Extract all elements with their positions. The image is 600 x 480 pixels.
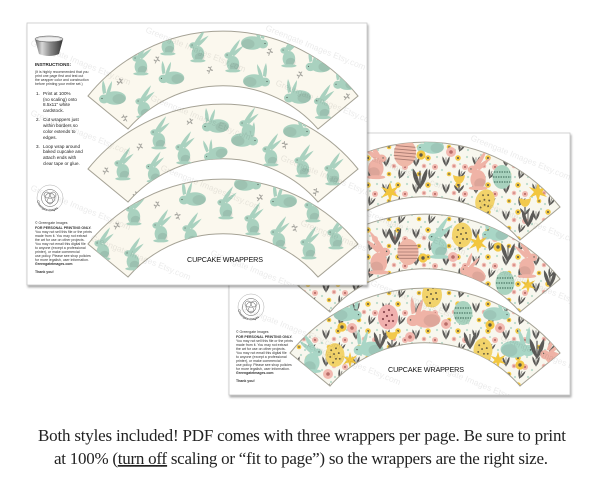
- text block: step 2: edges.: [43, 135, 57, 140]
- wrapper: bunny middle: [88, 104, 358, 202]
- text block: step 1: [36, 91, 77, 113]
- text block: step 3: 3.: [36, 144, 40, 149]
- text block: recommendation: before printing your entire set.): [35, 82, 83, 86]
- panel: bunny wrappers sheet: [26, 22, 370, 289]
- text block: usage notice (bunny sheet): You may not sell this file or the prints: [35, 230, 92, 234]
- watermarks: bunny sheet: Greengate Images Etsy.com: [29, 183, 132, 232]
- wrapper: floral top: [367, 142, 561, 241]
- text block: step 3: attach ends with: [43, 155, 77, 160]
- text block: step 3: Loop wrap around: [43, 144, 80, 149]
- text block: usage notice (bunny sheet): to anyone (except a professional: [35, 246, 86, 250]
- text block: usage notice (floral sheet): © Greengate Images: [236, 330, 269, 334]
- text block: usage notice (floral sheet): printer), or make commercial: [236, 359, 281, 363]
- watermarks: bunny sheet: Greengate Images Etsy.com: [29, 38, 132, 87]
- wrapper: bunny top: [88, 22, 358, 129]
- watermarks: floral sheet: Greengate Images Etsy.com: [499, 333, 600, 382]
- text block: step 3: clear tape or glue.: [43, 161, 80, 166]
- watermarks: bunny sheet: Greengate Images Etsy.com: [89, 233, 192, 282]
- text block: step 1: 8.5x11" white: [43, 102, 71, 107]
- heading: cupcake wrappers (floral): CUPCAKE WRAPPERS: [388, 365, 464, 374]
- watermarks: floral sheet: Greengate Images Etsy.com: [234, 233, 337, 282]
- watermarks: bunny sheet: Greengate Images Etsy.com: [159, 163, 262, 212]
- caption: at 100% (turn off scaling or “fit to page”) so the wrappers are the right size.: [54, 449, 548, 468]
- sheet background: [27, 23, 367, 285]
- text block: step 2: [36, 117, 79, 140]
- text block: step 2: 2.: [36, 117, 40, 122]
- sheet background: [229, 133, 570, 395]
- icon: logo (bunny sheet): Greengate Images: [37, 200, 58, 212]
- text block: usage notice (floral sheet): [236, 330, 293, 383]
- watermarks: bunny sheet: Greengate Images Etsy.com: [299, 218, 402, 267]
- watermarks: floral sheet: Greengate Images Etsy.com: [469, 133, 572, 182]
- wrapper: bunny bottom: [88, 166, 358, 277]
- watermarks: floral sheet: Greengate Images Etsy.com: [239, 158, 342, 207]
- text block: usage notice (floral sheet): FOR PERSONAL PRINTING ONLY.: [236, 335, 292, 339]
- text block: step 2: within borders so: [43, 123, 78, 128]
- watermarks: bunny sheet: Greengate Images Etsy.com: [279, 153, 382, 202]
- text block: usage notice (floral sheet): You may not sell this file or the prints: [236, 339, 293, 343]
- text block: usage notice (floral sheet): GreengateImages.com: [236, 371, 274, 375]
- watermarks: floral sheet: Greengate Images Etsy.com: [489, 263, 592, 312]
- watermarks: floral sheet: Greengate Images Etsy.com: [299, 338, 402, 387]
- text block: usage notice (floral sheet): the art for use on other projects.: [236, 347, 286, 351]
- watermarks: bunny sheet: Greengate Images Etsy.com: [144, 25, 247, 74]
- text block: usage notice (bunny sheet): You may not email this digital file: [35, 242, 86, 246]
- watermarks: floral sheet: Greengate Images Etsy.com: [424, 358, 527, 407]
- heading: instructions: INSTRUCTIONS:: [35, 62, 71, 67]
- text block: usage notice (floral sheet): Thank you!: [236, 379, 255, 383]
- text block: step 1: 1.: [36, 91, 40, 96]
- text block: step 1: cardstock.: [43, 108, 64, 113]
- text block: usage notice (floral sheet): made from it. You may not extract: [236, 343, 288, 347]
- watermarks: bunny sheet: Greengate Images Etsy.com: [149, 93, 252, 142]
- watermarks: floral sheet: Greengate Images Etsy.com: [369, 278, 472, 327]
- icon: cupcake liner: [35, 36, 63, 56]
- icon: logo (floral sheet): Greengate Images: [238, 310, 259, 320]
- panel: floral wrappers sheet: [228, 132, 573, 399]
- wrapper: floral middle: [290, 214, 560, 312]
- watermarks: floral sheet: Greengate Images Etsy.com: [364, 208, 467, 257]
- text block: usage notice (bunny sheet): [35, 221, 92, 274]
- text block: step 1: (no scaling) onto: [43, 97, 77, 102]
- text block: usage notice (floral sheet): for more legalish, user information.: [236, 367, 290, 371]
- text block: step 1: Print at 100%: [43, 91, 71, 96]
- text block: usage notice (bunny sheet): © Greengate Images: [35, 221, 68, 225]
- text block: usage notice (bunny sheet): printer), or make commercial: [35, 250, 80, 254]
- text block: usage notice (bunny sheet): use policy. Please see shop policies: [35, 254, 91, 258]
- text block: usage notice (floral sheet): to anyone (except a professional: [236, 355, 287, 359]
- caption: [38, 426, 566, 468]
- watermarks: floral sheet: Greengate Images Etsy.com: [344, 143, 447, 192]
- wrapper: floral bottom: [290, 282, 574, 386]
- icon: logo (bunny sheet): [36, 184, 64, 212]
- text block: usage notice (bunny sheet): the art for use on other projects.: [35, 238, 85, 242]
- heading: cupcake wrappers (bunny): CUPCAKE WRAPPERS: [187, 255, 263, 264]
- icon: logo (floral sheet): [238, 294, 264, 320]
- text block: usage notice (floral sheet): use policy. Please see shop policies: [236, 363, 292, 367]
- text block: step 2: Cut wrappers just: [43, 117, 79, 122]
- watermarks: bunny sheet: Greengate Images Etsy.com: [264, 23, 367, 72]
- text block: usage notice (bunny sheet): FOR PERSONAL PRINTING ONLY.: [35, 226, 91, 230]
- watermarks: bunny sheet: Greengate Images Etsy.com: [29, 108, 132, 157]
- text block: usage notice (bunny sheet): for more legalish, user information.: [35, 258, 89, 262]
- watermarks: bunny sheet: Greengate Images Etsy.com: [209, 248, 312, 297]
- watermarks: bunny sheet: Greengate Images Etsy.com: [274, 78, 377, 127]
- watermarks: floral sheet: [241, 136, 570, 395]
- watermarks: bunny sheet: [31, 26, 367, 285]
- text block: usage notice (bunny sheet): Thank you!: [35, 270, 54, 274]
- text block: step 2: color extends to: [43, 129, 76, 134]
- watermarks: floral sheet: Greengate Images Etsy.com: [479, 198, 582, 247]
- text block: recommendation: [35, 70, 89, 86]
- text block: step 3: [36, 144, 83, 166]
- watermarks: floral sheet: Greengate Images Etsy.com: [239, 303, 342, 352]
- text block: usage notice (floral sheet): You may not email this digital file: [236, 351, 287, 355]
- text block: usage notice (bunny sheet): made from it. You may not extract: [35, 234, 87, 238]
- text block: recommendation: the wrapper color and construction: [35, 78, 89, 82]
- text block: recommendation: print one page first and test out: [35, 74, 83, 78]
- text block: usage notice (bunny sheet): GreengateImages.com: [35, 262, 73, 266]
- text block: recommendation: (It is highly recommended that you: [35, 70, 89, 74]
- caption: Both styles included! PDF comes with three wrappers per page. Be sure to print: [38, 426, 566, 445]
- text block: step 3: baked cupcake and: [43, 149, 83, 154]
